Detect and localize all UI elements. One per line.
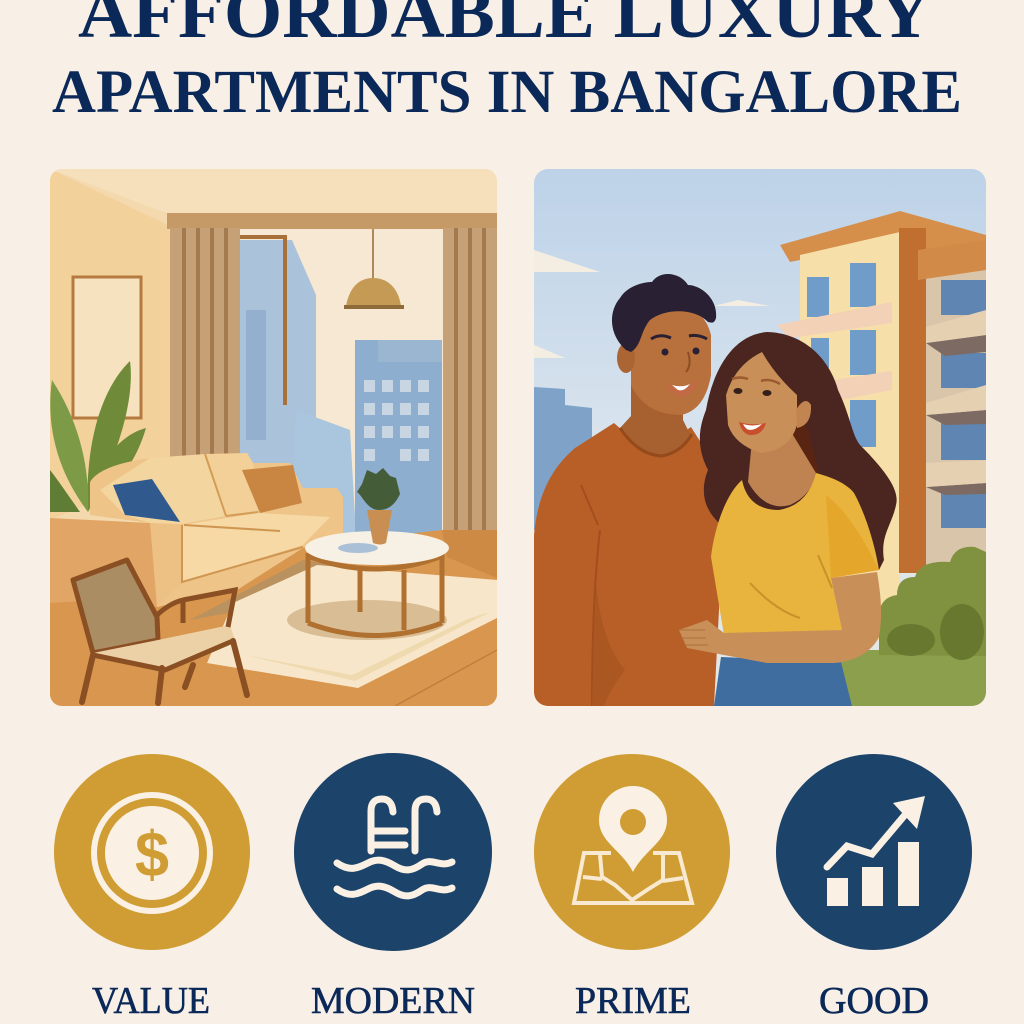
label: value: VALUE [92,980,210,1022]
icon: value coin: $ [135,818,169,890]
curtain left [170,228,240,468]
title [52,0,962,126]
panel: living room illustration [50,169,497,706]
window view [238,228,444,533]
sofa [50,453,343,607]
shrubs and lawn [835,547,986,710]
clouds [534,250,770,358]
plant [50,361,146,512]
coffee table [305,468,449,636]
icon: value coin [54,754,250,950]
picture frame [73,277,141,418]
curtain rod [167,213,497,229]
woman [679,332,897,706]
distant buildings [534,387,592,530]
apartment building [777,211,986,640]
man [534,274,719,706]
panel: couple and apartment building illustration [534,169,986,710]
pendant lamp [344,229,404,309]
label: good: GOOD [819,980,929,1022]
armchair [73,560,247,703]
title: APARTMENTS IN BANGALORE [52,59,962,126]
curtain right [443,228,497,560]
floor [50,530,497,706]
rug [207,565,497,688]
label: prime: PRIME [575,980,691,1022]
icon: good growth chart [776,754,972,950]
ceiling [50,169,497,214]
icon: modern pool [294,753,492,951]
label: modern: MODERN [311,980,475,1022]
wall left [50,169,170,520]
icon: prime location [534,754,730,950]
